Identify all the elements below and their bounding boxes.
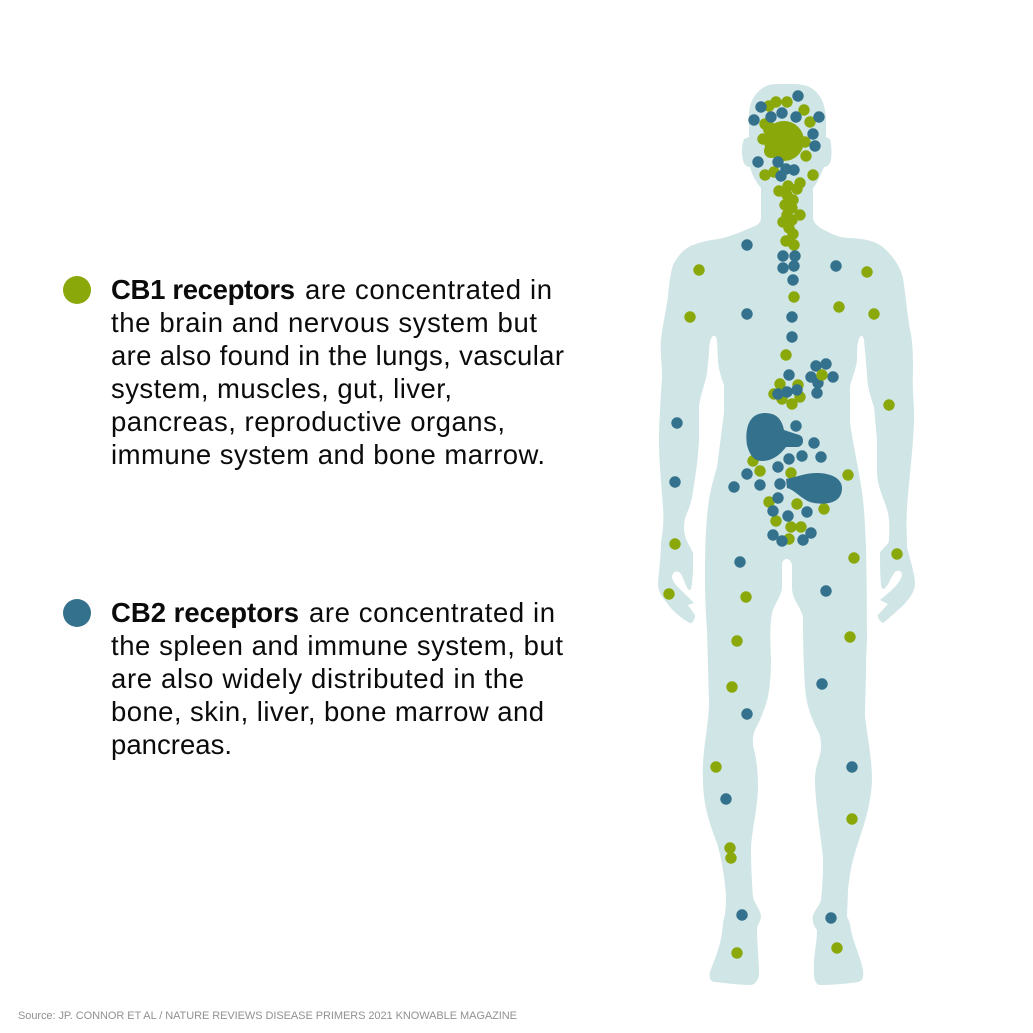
text: CB2 description: the spleen and immune system, but	[111, 630, 563, 661]
legend block: CB1 receptors	[63, 274, 564, 470]
text: CB2 description: CB2 receptors	[111, 597, 299, 628]
text: CB2 description: pancreas.	[111, 729, 232, 760]
icon: CB2 bullet	[63, 599, 91, 627]
text: CB2 description	[111, 597, 563, 760]
CB1 dot overlapping the CB2 cluster	[816, 369, 828, 381]
organ: liver	[746, 413, 803, 461]
legend block: CB2 receptors	[63, 597, 563, 760]
text: CB1 description: CB1 receptors	[111, 274, 295, 305]
text: CB1 description: immune system and bone marrow.	[111, 439, 545, 470]
text: CB1 description: are concentrated in	[305, 274, 552, 305]
text: CB1 description	[111, 274, 564, 470]
text: CB1 description: the brain and nervous system but	[111, 307, 537, 338]
text: CB1 description: are also found in the lungs, vascular	[111, 340, 564, 371]
organ: spleen	[786, 473, 842, 504]
icon: CB1 bullet	[63, 276, 91, 304]
text: CB2 description: are concentrated in	[309, 597, 555, 628]
CB1 receptor dots	[663, 96, 903, 959]
CB1 brain cluster	[757, 118, 811, 161]
text: CB1 description: system, muscles, gut, liver,	[111, 373, 452, 404]
CB2 receptor dots	[669, 90, 858, 924]
source line: Source: JP. CONNOR ET AL / NATURE REVIEWS DISEASE PRIMERS 2021 KNOWABLE MAGAZINE	[18, 1010, 517, 1022]
body silhouette	[658, 84, 915, 985]
body figure with receptors	[658, 84, 915, 985]
text: CB2 description: bone, skin, liver, bone marrow and	[111, 696, 544, 727]
text: CB2 description: are also widely distributed in the	[111, 663, 524, 694]
text: CB1 description: pancreas, reproductive organs,	[111, 406, 505, 437]
